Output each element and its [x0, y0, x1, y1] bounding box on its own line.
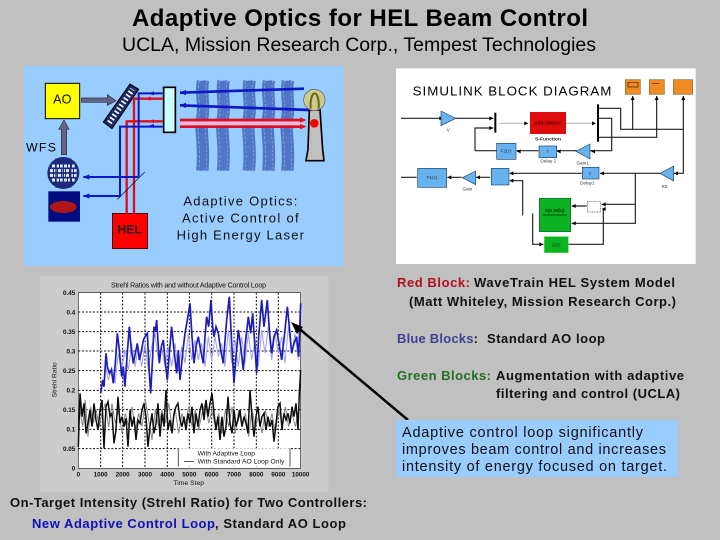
x axis labels: 2000	[116, 472, 130, 479]
y axis labels: 0.4	[67, 309, 76, 316]
arrow: callout pointer to chart	[291, 322, 408, 420]
icon: HEL laser box: HEL	[118, 222, 142, 236]
block labels	[427, 127, 668, 192]
chart caption: On-Target Intensity (Strehl Ratio) for Two Controllers:	[10, 495, 367, 510]
x axis title: Time Step	[173, 480, 204, 487]
callout: Adaptive control loop significantly	[402, 425, 644, 441]
caption: adaptive optics: High Energy Laser	[177, 227, 305, 242]
block labels: K5	[662, 184, 668, 189]
y axis labels: 0.15	[63, 407, 76, 414]
block labels: Gain1	[576, 161, 589, 166]
blue blocks	[418, 111, 674, 187]
grid lines	[78, 293, 301, 468]
x axis labels: 1000	[94, 472, 108, 479]
x axis labels: 5000	[182, 472, 197, 479]
chart plot area	[78, 293, 301, 468]
green blocks: G(z)	[551, 243, 561, 248]
callout	[396, 420, 678, 477]
chart legend: With Standard AO Loop Only	[198, 458, 285, 465]
text block: blue blocks: Standard AO loop	[487, 331, 605, 346]
x axis labels: 8000	[249, 472, 264, 479]
y axis labels: 0	[72, 466, 76, 473]
green blocks: A(K,W(k))	[545, 208, 565, 213]
red S-function block	[530, 112, 566, 142]
beam paths: blue	[83, 89, 309, 199]
series: standard AO loop (black)	[78, 370, 301, 448]
subtitle: UCLA, Mission Research Corp., Tempest Technologies	[122, 34, 596, 56]
x axis labels: 6000	[205, 472, 219, 479]
icon: HEL laser box	[112, 213, 148, 249]
text block: red block: WaveTrain HEL System Model	[474, 275, 675, 290]
chart caption	[10, 495, 367, 531]
caption: adaptive optics	[177, 193, 305, 242]
block labels: Delay 2	[540, 159, 557, 164]
x axis labels: 4000	[160, 472, 175, 479]
green blocks	[539, 198, 571, 253]
y axis labels: 0.25	[63, 368, 76, 375]
text block: green blocks: filtering and control (UCLA)	[496, 386, 680, 401]
arrow: WFS to AO	[59, 120, 69, 155]
callout: intensity of energy focused on target.	[402, 459, 667, 475]
series: adaptive loop (blue)	[101, 297, 301, 393]
x axis labels	[77, 472, 310, 479]
text block: red block: (Matt Whiteley, Mission Research Corp.)	[409, 294, 676, 309]
WFS label: WFS	[26, 140, 56, 154]
x axis labels: 9000	[271, 472, 286, 479]
mux bars	[494, 104, 599, 142]
text block: green blocks: Green Blocks:	[397, 368, 491, 383]
block labels: F1(z)	[427, 175, 438, 180]
red S-function block: ABS.SIMULK	[535, 120, 562, 125]
x axis labels: 0	[77, 472, 81, 479]
title: Adaptive Optics for HEL Beam Control	[132, 5, 588, 32]
caption: adaptive optics: Active Control of	[182, 210, 299, 225]
y axis labels	[63, 290, 76, 473]
text block: red block	[397, 275, 676, 309]
panel: Simulink block diagram	[396, 68, 696, 264]
y axis title: Strehl Ratio	[52, 362, 59, 397]
icon: target missile	[304, 89, 325, 161]
text block: red block: Red Block:	[397, 275, 470, 290]
x axis labels: 3000	[138, 472, 153, 479]
block labels: F2(z)	[501, 149, 512, 154]
icon: far-field spot	[48, 191, 80, 222]
x axis labels: 7000	[227, 472, 242, 479]
y axis labels: 0.45	[63, 290, 76, 297]
chart title: Strehl Ratios with and without Adaptive Control Loop	[111, 282, 266, 289]
switch block	[587, 201, 601, 212]
signal arrowheads	[439, 96, 685, 246]
text block: blue blocks	[397, 331, 605, 346]
text block: green blocks	[397, 368, 684, 401]
y axis labels: 0.05	[63, 446, 76, 453]
turbulence columns	[198, 81, 292, 171]
icon: AO box	[45, 83, 80, 119]
callout: improves beam control and increases	[402, 442, 666, 458]
y axis labels: 0.35	[63, 329, 76, 336]
y axis labels: 0.2	[67, 388, 76, 395]
chart caption: , Standard AO Loop	[215, 516, 346, 531]
red S-function block: S-Function	[535, 136, 561, 142]
chart legend	[178, 448, 290, 467]
y axis labels: 0.3	[67, 348, 76, 355]
chart legend: With Adaptive Loop	[198, 450, 255, 457]
text block: blue blocks: Blue Blocks:	[397, 331, 478, 346]
y axis labels: 0.1	[67, 427, 76, 434]
panel: Strehl ratio chart	[40, 276, 328, 492]
beam splitter	[117, 172, 145, 199]
caption: adaptive optics: Adaptive Optics:	[183, 193, 297, 208]
block labels: z	[589, 171, 592, 176]
chart caption: New Adaptive Control Loop	[32, 516, 215, 531]
icon: wavefront sensor	[47, 157, 79, 189]
x axis labels: 10000	[292, 472, 310, 479]
block labels: z	[547, 149, 550, 154]
orange scope blocks	[625, 80, 693, 94]
block labels: Gain	[462, 187, 473, 192]
icon: deformable mirror	[103, 84, 139, 129]
panel: adaptive optics schematic	[24, 66, 343, 266]
text block: green blocks: Augmentation with adaptive	[496, 368, 684, 383]
arrow: AO to deformable mirror	[81, 95, 116, 105]
beam paths: red	[127, 97, 307, 213]
signal wires	[401, 96, 683, 244]
diagram heading: SIMULINK BLOCK DIAGRAM	[413, 84, 611, 99]
block labels: V	[447, 127, 451, 132]
block labels: Delay1	[580, 181, 595, 186]
icon: corrector plate	[164, 87, 175, 132]
icon: AO box: AO	[53, 93, 72, 107]
